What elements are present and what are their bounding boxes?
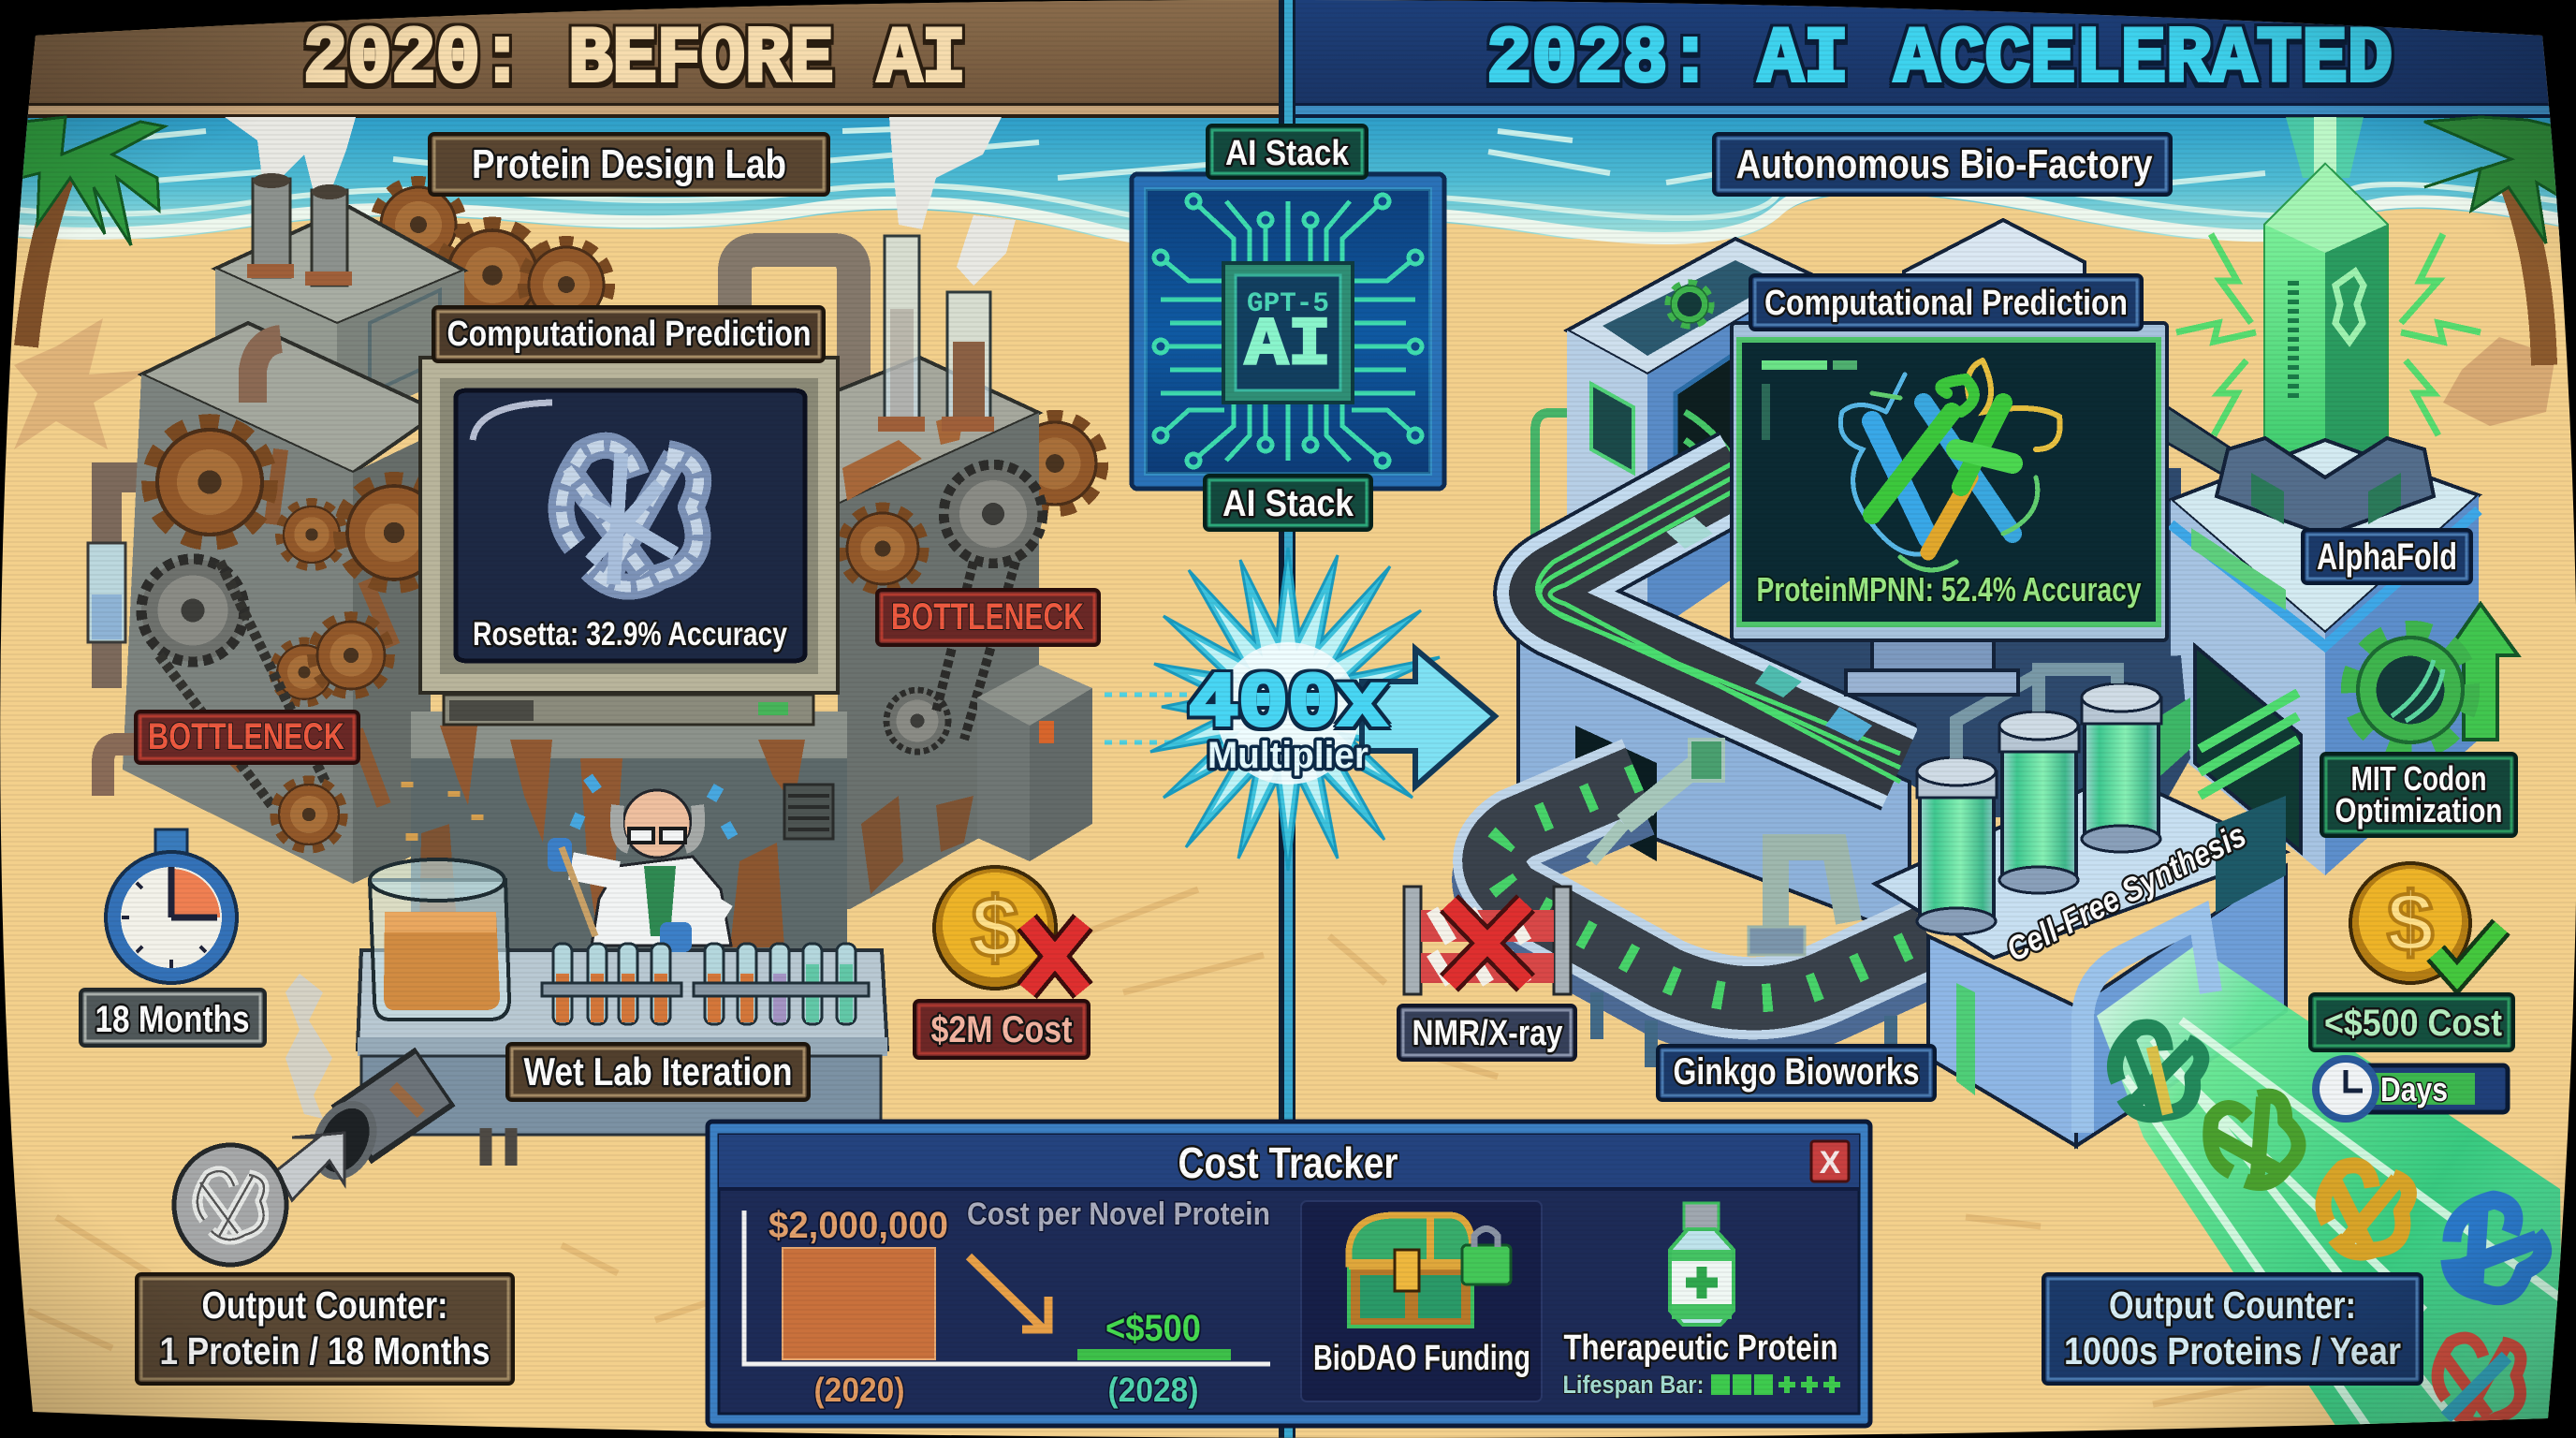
rusty gears on left block: [152, 424, 268, 540]
value: $2,000,000: $2,000,000: [768, 1205, 948, 1246]
green coolant pipe: [1535, 413, 1580, 552]
lifespan bar: [1563, 1371, 1840, 1399]
test tube racks: [542, 944, 869, 1024]
lower left block: [123, 323, 440, 884]
therapeutic protein block: [1563, 1203, 1840, 1399]
door arch: [2083, 917, 2211, 1133]
label: cell-free synthesis: Cell-Free Synthesis: [2000, 815, 2252, 969]
beaker: [370, 782, 509, 1020]
multiplier caption: Multiplier: [1208, 735, 1368, 776]
dark plant floor behind tanks: [1910, 655, 2190, 824]
low-res protein: [562, 446, 698, 587]
year 2020: (2020): [814, 1371, 904, 1409]
label: ginkgo bioworks: [1658, 1046, 1935, 1100]
label: computational prediction left: Computational Prediction: [447, 315, 811, 354]
lab table: [358, 950, 887, 1166]
middle block: [411, 712, 847, 950]
rear module: [1904, 220, 2085, 323]
colorful protein: [1840, 360, 2060, 570]
output counter right: [2043, 1274, 2422, 1384]
icon: gold coin with check: $: [2387, 876, 2434, 970]
arrow: multiplier: [1362, 649, 1495, 786]
icon: treasure chest: [1349, 1215, 1511, 1327]
Rosetta accuracy: Rosetta: 32.9% Accuracy: [473, 616, 787, 653]
therapeutic protein label: Therapeutic Protein: [1563, 1328, 1838, 1368]
icon: codon gear with up arrow: [2352, 604, 2518, 748]
icon: vial: [1670, 1203, 1734, 1325]
output beam: [2097, 946, 2565, 1438]
center divider: [1279, 0, 1295, 1438]
label: MIT codon optimization: MIT Codon: [2351, 759, 2486, 798]
vent: [784, 785, 833, 839]
label: bottleneck right: [877, 590, 1099, 645]
monitor stand: [1846, 640, 2018, 695]
AI chip: [1132, 174, 1444, 489]
close button: X: [1820, 1145, 1841, 1181]
tanks: [1917, 683, 2161, 934]
header: 2028 AI accelerated: [1295, 0, 2576, 118]
NMR/X-ray barrier: [1404, 887, 1571, 994]
factory buildings: [1494, 220, 2479, 1146]
icon: gold coin with red x: [934, 867, 1083, 990]
output counter right: 1000s Proteins / Year: [2064, 1329, 2401, 1372]
glass tubes: [878, 236, 994, 432]
small control box: [977, 665, 1092, 861]
label: MIT codon optimization: Optimization: [2334, 791, 2503, 829]
chip text: GPT-5: GPT-5: [1247, 288, 1329, 320]
machine: rusty protein design lab: [88, 117, 1100, 950]
top block: [212, 205, 468, 396]
label: autonomous bio-factory: [1714, 134, 2171, 195]
label: autonomous bio-factory: Autonomous Bio-Factory: [1735, 141, 2153, 187]
output counter right: Output Counter:: [2109, 1284, 2356, 1327]
monitor base: [444, 695, 813, 725]
label: NMR/X-ray: [1398, 1005, 1575, 1060]
server tower: [1567, 239, 1813, 637]
right block: [838, 358, 1043, 909]
interior floor: [1732, 468, 2181, 805]
label: ginkgo bioworks: Ginkgo Bioworks: [1674, 1051, 1919, 1093]
label: under $500 cost: <$500 Cost: [2324, 1003, 2502, 1044]
rust elbow pipe: [253, 339, 281, 403]
proteins in beam: [2104, 1020, 2554, 1423]
bar: 2020: [783, 1248, 935, 1359]
label: computational prediction right: [1750, 275, 2142, 330]
lightning bolts: [2176, 234, 2481, 435]
output pipe: [305, 1077, 435, 1185]
panel title: Cost Tracker: [1178, 1138, 1398, 1187]
bar chart: [744, 1196, 1270, 1409]
bar: 2028: [1077, 1349, 1231, 1360]
label: AI stack bottom: AI Stack: [1222, 483, 1354, 524]
label: wet lab iteration: Wet Lab Iteration: [524, 1049, 792, 1093]
label: computational prediction left: [433, 307, 824, 361]
days progress bar: [2316, 1059, 2508, 1119]
close button: [1811, 1141, 1849, 1181]
arrow: cost decline: [969, 1256, 1048, 1329]
output counter left: [137, 1274, 513, 1384]
label: 18 months: [80, 990, 265, 1046]
label: 18 months: 18 Months: [95, 999, 249, 1040]
label: alphafold: AlphaFold: [2317, 536, 2457, 578]
monitor right: [1732, 323, 2167, 695]
label: AI stack top: [1208, 125, 1367, 178]
rusty gears behind: [377, 183, 460, 266]
label: AI stack top: AI Stack: [1225, 134, 1350, 173]
label: alphafold: [2303, 530, 2471, 583]
monitor left: [420, 358, 838, 725]
label: MIT codon optimization: [2321, 754, 2516, 836]
header: 2020 before AI: [0, 0, 1279, 118]
robot arm right: [1749, 847, 1849, 955]
panel: cost tracker: [708, 1122, 1870, 1426]
icon: stopwatch: [106, 829, 237, 983]
conveyor legs: [1597, 992, 1891, 1067]
label: bottleneck right: BOTTLENECK: [891, 596, 1084, 638]
icon: silver protein coin: [174, 1145, 286, 1265]
synthesis platform: [1875, 774, 2286, 958]
label: protein design lab: [430, 134, 828, 195]
label: wet lab iteration: [507, 1044, 809, 1100]
lower-left pipe: [103, 744, 140, 796]
year 2028: (2028): [1108, 1371, 1198, 1409]
label: computational prediction right: Computational Prediction: [1764, 284, 2128, 323]
smoke from output pipe: [285, 974, 332, 1119]
title: 2028 AI accelerated: 2028: AI ACCELERATED: [1486, 16, 2393, 105]
lower U conveyor: [1494, 796, 1928, 1017]
palm tree right: [2424, 117, 2560, 365]
ProteinMPNN accuracy: ProteinMPNN: 52.4% Accuracy: [1756, 570, 2142, 609]
lifespan bar: Lifespan Bar:: [1563, 1371, 1704, 1399]
chimneys: [247, 173, 352, 286]
gears on right block: [843, 509, 922, 588]
title: 2020 before AI: 2020: BEFORE AI: [303, 16, 966, 105]
conveyor connector to crystal: [2162, 404, 2247, 477]
rusty pipe arch: [735, 250, 854, 403]
dotted speed lines: [1105, 695, 1198, 742]
energy crystal: [2176, 117, 2481, 477]
output counter left: Output Counter:: [202, 1284, 447, 1327]
400x value: 400x: [1189, 661, 1387, 748]
green feed conveyor: [2106, 697, 2190, 791]
left glass pipe: [88, 477, 139, 688]
circuit traces: [1154, 195, 1422, 467]
label: protein design lab: Protein Design Lab: [472, 141, 786, 187]
chart title: Cost per Novel Protein: [967, 1196, 1270, 1232]
smoke plumes: [225, 117, 1016, 286]
label: bottleneck left: BOTTLENECK: [148, 716, 344, 757]
icon: gold coin with red x: $: [971, 880, 1019, 976]
palm tree left: [21, 117, 165, 346]
BioDAO funding label: BioDAO Funding: [1313, 1339, 1530, 1378]
label: bottleneck left: [136, 712, 359, 763]
starburst and arrow: [1105, 548, 1495, 871]
chip text: AI: AI: [1245, 307, 1331, 384]
label: $2M cost: [915, 1001, 1089, 1058]
label: $2M cost: $2M Cost: [930, 1009, 1073, 1050]
value: under $500: <$500: [1105, 1308, 1201, 1349]
icon: clock: [2316, 1059, 2376, 1119]
label: NMR/X-ray: NMR/X-ray: [1412, 1014, 1563, 1053]
icon: gold coin with check: [2350, 863, 2501, 983]
label: under $500 cost: [2310, 994, 2513, 1050]
scientist: [548, 777, 733, 952]
robot arm left: [1591, 740, 1723, 861]
days progress bar: Days: [2380, 1070, 2448, 1108]
upper conveyor building: [1518, 609, 1910, 936]
output counter left: 1 Protein / 18 Months: [159, 1329, 490, 1372]
BioDAO card: [1301, 1201, 1542, 1401]
label: AI stack bottom: [1205, 476, 1371, 530]
crystal base and right building: [2171, 438, 2479, 875]
arrow: protein into pipe: [277, 1133, 344, 1200]
